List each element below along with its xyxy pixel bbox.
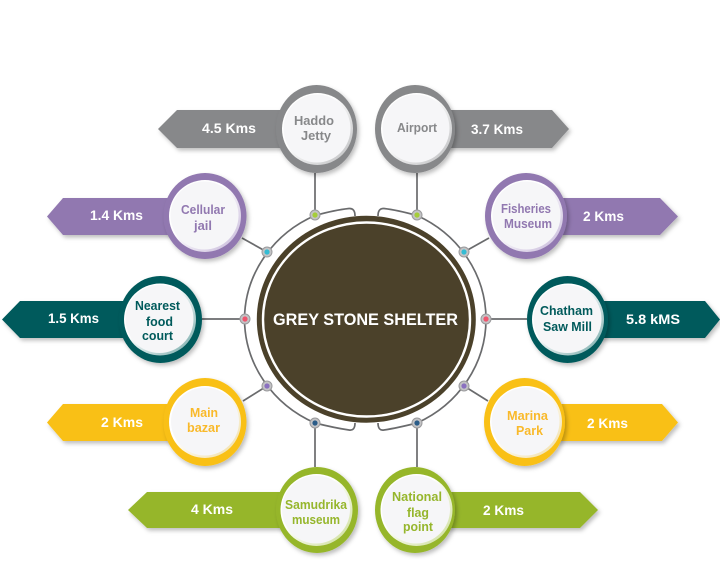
item: National flag point: National bbox=[392, 490, 442, 504]
title: GREY STONE SHELTER bbox=[273, 310, 458, 329]
item: Airport: 3.7 Kms bbox=[471, 121, 523, 137]
item: Cellular jail bbox=[47, 173, 246, 259]
item: Nearest food court: 1.5 Kms bbox=[48, 310, 99, 326]
item: Nearest food court: Nearest bbox=[135, 299, 181, 313]
item: Samudrika museum: 4 Kms bbox=[191, 501, 233, 517]
item: Nearest food court: court bbox=[142, 329, 174, 343]
connector ring bbox=[202, 173, 527, 467]
item: Haddo Jetty: 4.5 Kms bbox=[202, 120, 256, 136]
item: Main bazar: bazar bbox=[187, 421, 220, 435]
item: Cellular jail: jail bbox=[193, 219, 212, 233]
item: National flag point: 2 Kms bbox=[483, 502, 524, 518]
node markers bbox=[240, 210, 491, 428]
item: Chatham Saw Mill: Chatham bbox=[540, 304, 593, 318]
item: Fisheries Museum: Fisheries bbox=[501, 202, 551, 216]
item: Fisheries Museum bbox=[485, 173, 678, 259]
item: Chatham Saw Mill bbox=[527, 276, 720, 363]
item: Haddo Jetty: Haddo bbox=[294, 114, 334, 128]
item: Main bazar: Main bbox=[190, 406, 218, 420]
item: Samudrika museum: Samudrika bbox=[285, 498, 348, 512]
item: Nearest food court: food bbox=[146, 315, 173, 329]
central circle: Grey Stone Shelter bbox=[257, 216, 476, 423]
item: Airport: Airport bbox=[397, 121, 438, 135]
item: Marina Park: 2 Kms bbox=[587, 415, 628, 431]
item: Haddo Jetty: Jetty bbox=[301, 129, 331, 143]
item: Chatham Saw Mill: Saw Mill bbox=[543, 320, 592, 334]
item: National flag point: flag bbox=[407, 506, 429, 520]
item: National flag point: point bbox=[403, 520, 434, 534]
item: Samudrika museum: museum bbox=[292, 513, 340, 527]
item: Fisheries Museum: Museum bbox=[504, 217, 552, 231]
item: Marina Park: Marina bbox=[507, 409, 549, 423]
item: Samudrika museum bbox=[128, 467, 358, 553]
item: Marina Park bbox=[484, 378, 678, 466]
item: National flag point bbox=[375, 467, 598, 553]
item: Marina Park: Park bbox=[516, 424, 543, 438]
item: Cellular jail: 1.4 Kms bbox=[90, 207, 143, 223]
item: Nearest food court bbox=[2, 276, 202, 363]
item: Main bazar: 2 Kms bbox=[101, 414, 143, 430]
item: Fisheries Museum: 2 Kms bbox=[583, 208, 624, 224]
item: Haddo Jetty bbox=[158, 85, 357, 173]
item: Airport bbox=[375, 85, 569, 173]
item: Cellular jail: Cellular bbox=[181, 203, 225, 217]
item: Chatham Saw Mill: 5.8 kMS bbox=[626, 311, 680, 327]
item: Main bazar bbox=[47, 378, 246, 466]
